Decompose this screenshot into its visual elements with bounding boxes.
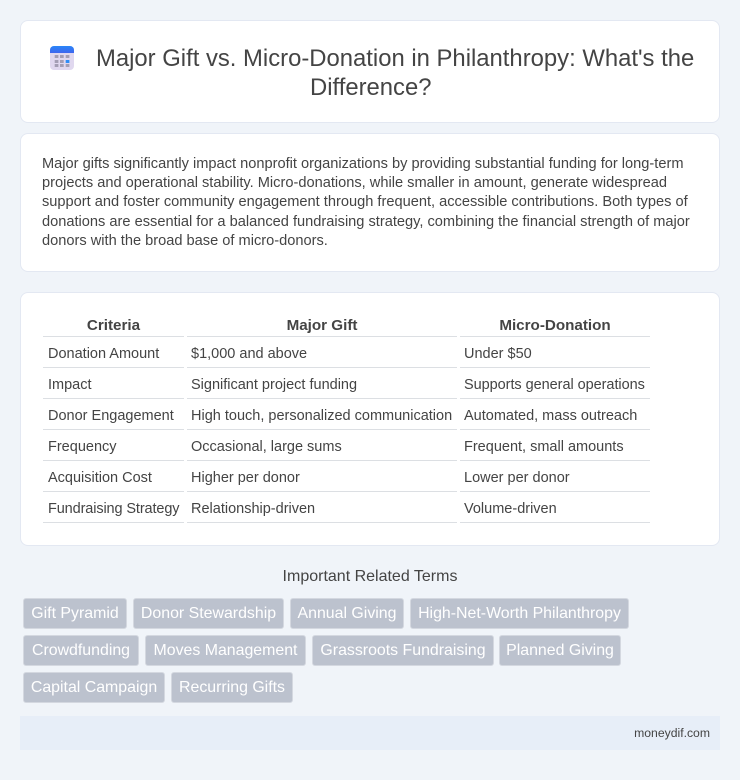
tag: Crowdfunding	[32, 642, 130, 659]
tag: Grassroots Fundraising	[320, 642, 486, 659]
table header: Major Gift	[287, 317, 357, 334]
row: acquisition cost	[48, 470, 570, 486]
row: frequency: Frequency	[48, 439, 117, 455]
title: Difference?	[310, 74, 432, 101]
row: donation amount	[48, 346, 532, 362]
tag: Gift Pyramid	[31, 605, 119, 622]
icon: calendar	[50, 46, 74, 70]
tag: High-Net-Worth Philanthropy	[418, 605, 621, 622]
intro paragraph: donations are essential for a balanced fundraising strategy, combining the financial strength of major	[42, 214, 690, 230]
row: impact: Impact	[48, 377, 92, 393]
tag: Recurring Gifts	[179, 679, 285, 696]
tag	[133, 598, 284, 629]
row: fundraising strategy: Fundraising Strategy	[48, 501, 179, 517]
row: donor engagement: High touch, personalized communication	[191, 408, 452, 424]
row: frequency: Frequent, small amounts	[464, 439, 624, 455]
row: acquisition cost: Lower per donor	[464, 470, 570, 486]
tag	[171, 672, 293, 703]
row: frequency	[48, 439, 624, 455]
tag	[312, 635, 494, 666]
table header	[87, 317, 611, 334]
title: Major Gift vs. Micro-Donation in Philanthropy: What's the	[96, 45, 694, 72]
table header: Criteria	[87, 317, 140, 334]
panel: title card	[20, 20, 720, 123]
title	[96, 45, 694, 101]
row: frequency: Occasional, large sums	[191, 439, 342, 455]
tag	[410, 598, 629, 629]
tag	[23, 635, 139, 666]
row: acquisition cost: Higher per donor	[191, 470, 300, 486]
panel: intro text card	[20, 133, 720, 272]
row: impact: Significant project funding	[191, 377, 357, 393]
intro paragraph	[42, 156, 690, 249]
tag	[145, 635, 306, 666]
row: donation amount: Under $50	[464, 346, 532, 362]
row: donation amount: $1,000 and above	[191, 346, 307, 362]
row: donor engagement	[48, 408, 637, 424]
row: donor engagement: Donor Engagement	[48, 408, 174, 424]
tag	[23, 598, 127, 629]
row: fundraising strategy: Relationship-driven	[191, 501, 315, 517]
intro paragraph: donors with the broad base of micro-donors.	[42, 233, 328, 249]
table header: Micro-Donation	[499, 317, 611, 334]
heading: related terms: Important Related Terms	[283, 568, 457, 585]
tag: Moves Management	[154, 642, 297, 659]
intro paragraph: projects and operational stability. Micro-donations, while smaller in amount, generate widespread	[42, 175, 667, 191]
intro paragraph: Major gifts significantly impact nonprofit organizations by providing substantial funding for long-term	[42, 156, 684, 172]
tag: Capital Campaign	[31, 679, 157, 696]
row: acquisition cost: Acquisition Cost	[48, 470, 152, 486]
related term tags	[23, 598, 629, 703]
tag	[499, 635, 621, 666]
comparison table	[43, 317, 650, 523]
tag	[290, 598, 404, 629]
row: fundraising strategy	[48, 501, 557, 517]
tag	[23, 672, 165, 703]
row: fundraising strategy: Volume-driven	[464, 501, 557, 517]
intro paragraph: support and foster community engagement through frequent, accessible contributions. Both types of	[42, 194, 688, 210]
panel: comparison table card	[20, 292, 720, 546]
tag: Donor Stewardship	[141, 605, 276, 622]
footer credit: moneydif.com	[634, 726, 710, 740]
row: donor engagement: Automated, mass outreach	[464, 408, 637, 424]
tag: Annual Giving	[298, 605, 396, 622]
row: impact	[48, 377, 645, 393]
tag: Planned Giving	[506, 642, 614, 659]
row: impact: Supports general operations	[464, 377, 645, 393]
footer bar	[20, 716, 720, 750]
row: donation amount: Donation Amount	[48, 346, 159, 362]
